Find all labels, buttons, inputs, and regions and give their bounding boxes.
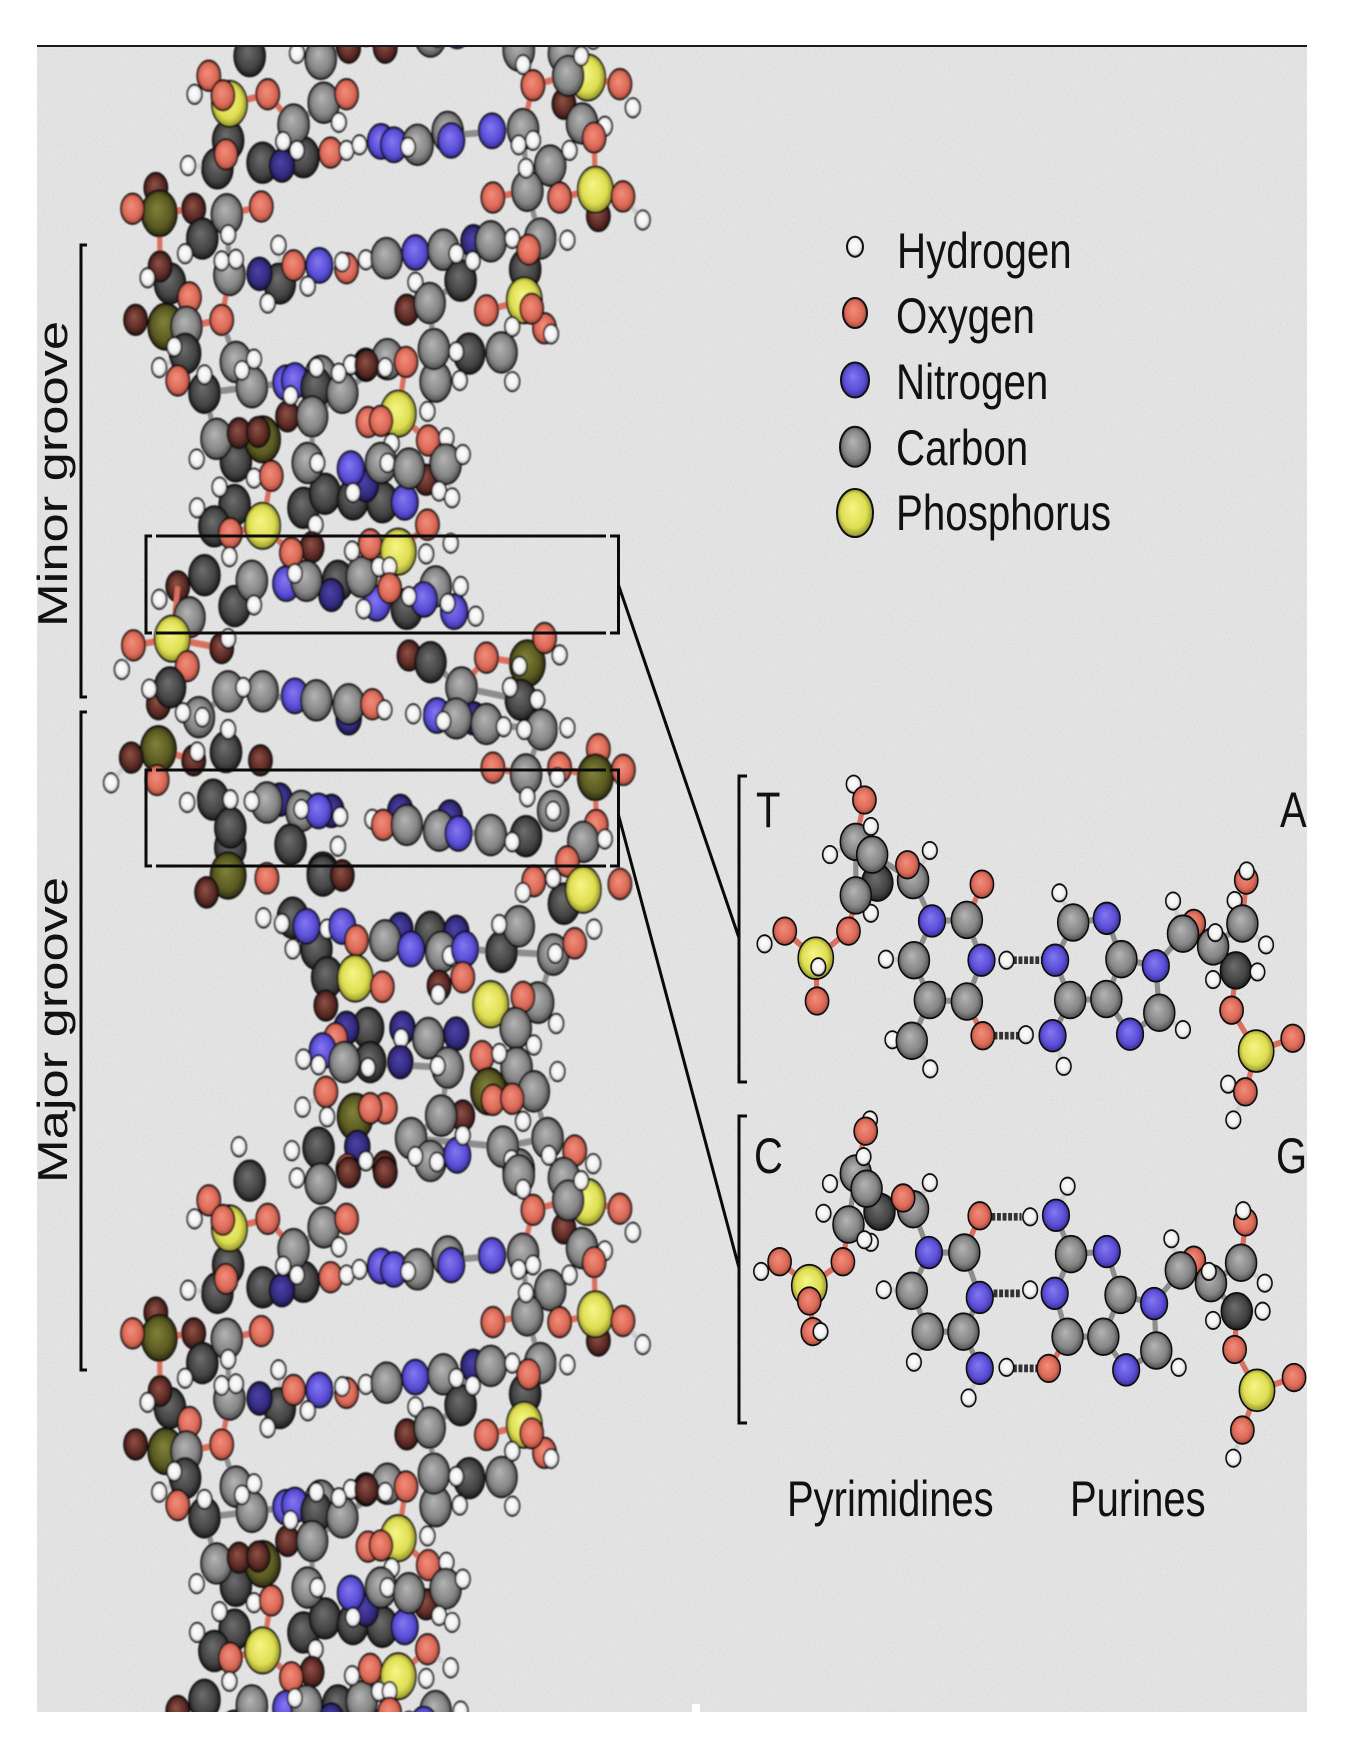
upper oxygen bonds xyxy=(133,76,623,553)
T-A bonds xyxy=(856,842,1242,1041)
sixth level, right strand xyxy=(397,623,635,877)
lower period bonds xyxy=(344,926,553,1147)
legend: nitrogen: Nitrogen xyxy=(896,354,1048,410)
atoms cut by the top edge xyxy=(334,47,600,59)
fifth level lower left atoms xyxy=(115,597,235,681)
C-G oxygen bonds xyxy=(780,1131,1294,1430)
C-G base pair molecule xyxy=(754,1111,1306,1467)
T-A hydrogen sticks xyxy=(765,784,1266,1120)
legend: carbon: Carbon xyxy=(896,420,1028,476)
top cluster, left strand xyxy=(181,33,397,189)
T-A base pair molecule xyxy=(757,776,1304,1129)
fourth level cluster xyxy=(189,416,470,549)
label: G: G xyxy=(1276,1128,1307,1184)
bracket: minor groove xyxy=(81,245,87,697)
label: A: A xyxy=(1280,782,1307,838)
C-G hydrogen sticks xyxy=(761,1173,1265,1458)
bracket: T-A pair xyxy=(739,776,747,1082)
legend xyxy=(837,223,1111,541)
C-G hydrogen bonds xyxy=(991,1217,1039,1368)
label: minor groove: Minor groove xyxy=(29,321,76,627)
upper backbone bonds xyxy=(202,103,550,581)
lower period hydrogen bonds xyxy=(263,918,594,1107)
fifth level cluster, boxed pair xyxy=(152,510,483,629)
label: Pyrimidines: Pyrimidines xyxy=(787,1471,994,1527)
connector: lower box to C-G pair xyxy=(618,815,739,1268)
sixth level, left base and backbone xyxy=(104,667,392,795)
label: Purines: Purines xyxy=(1070,1471,1206,1527)
label: T: T xyxy=(756,782,780,838)
T-A hydrogen bonds xyxy=(994,960,1043,1036)
legend: oxygen: Oxygen xyxy=(896,288,1035,344)
second level, left strand and base xyxy=(121,173,575,343)
lower period atoms, back layer xyxy=(195,852,632,998)
small white tick at bottom edge xyxy=(692,1704,700,1712)
C-G bonds xyxy=(848,1173,1241,1370)
selection box: lower base pair xyxy=(146,770,618,866)
T-A oxygen bonds xyxy=(785,800,1293,1092)
legend: phosphorus: Phosphorus xyxy=(896,485,1111,541)
lower half of period xyxy=(195,852,632,1190)
connector: upper box to T-A pair xyxy=(618,585,739,938)
label: C: C xyxy=(754,1128,783,1184)
bracket: major groove xyxy=(81,712,87,1370)
upper hydrogen bonds xyxy=(148,76,643,616)
lower period atoms, middle layer xyxy=(296,955,565,1112)
helix middle oxygen bonds xyxy=(144,585,600,810)
helix middle bonds xyxy=(199,662,542,835)
DNA double helix model xyxy=(104,13,650,1754)
top rule xyxy=(37,45,1307,47)
helix middle hydrogen bonds xyxy=(114,656,560,806)
helix copy below xyxy=(121,1155,650,1754)
seventh level, lower boxed pair xyxy=(180,779,520,893)
top base pair and right strand xyxy=(368,30,650,231)
bracket: C-G pair xyxy=(739,1116,747,1423)
lower period atoms, front layer xyxy=(232,1068,601,1190)
third level cluster xyxy=(124,282,520,456)
legend: hydrogen: Hydrogen xyxy=(897,223,1072,279)
base pair diagrams xyxy=(754,776,1306,1467)
selection box: upper base pair xyxy=(146,536,618,633)
label: major groove: Major groove xyxy=(29,877,76,1183)
helix upper section xyxy=(121,30,650,629)
